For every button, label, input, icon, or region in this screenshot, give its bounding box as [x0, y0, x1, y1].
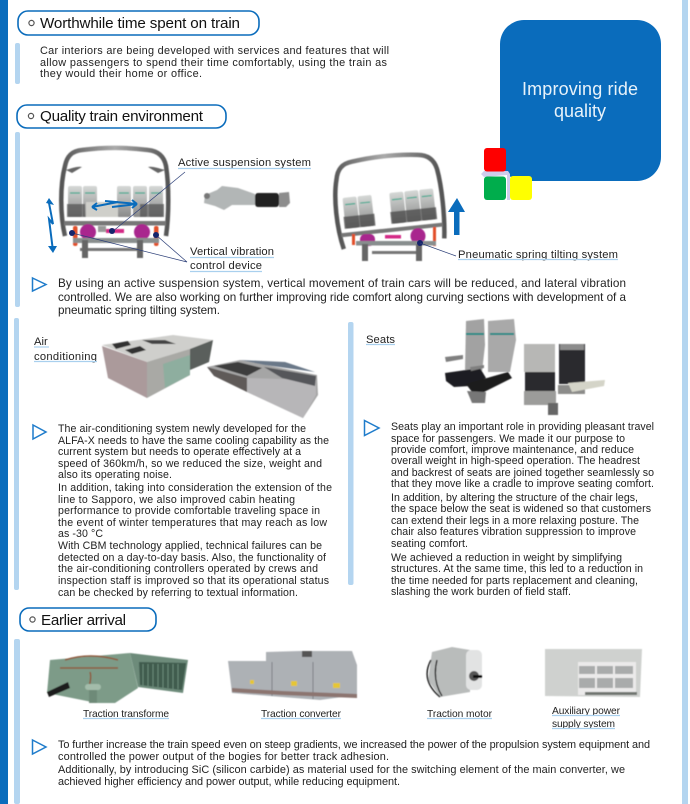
text block: air conditioning description: line to Sapporo, we also improved cabin heating [58, 494, 295, 506]
label: Active suspension system: Active suspension system [178, 157, 311, 169]
title card: Improving ride quality: Improving ride [522, 79, 638, 99]
label: Auxiliary power supply system: Auxiliary power [552, 706, 621, 717]
text block: seats description: slashing the work burden of field staff. [391, 586, 571, 598]
label: Air conditioning: conditioning [34, 351, 97, 363]
image: traction converter [228, 651, 357, 700]
text block: suspension description [32, 277, 626, 317]
image: seats [445, 319, 605, 415]
image: air conditioning units [102, 335, 318, 418]
title card: Improving ride quality: quality [554, 101, 606, 121]
image: traction transformer [47, 653, 188, 703]
text block: air conditioning description: the air-conditioning controllers operated by crews and [58, 563, 318, 575]
text block: earlier arrival description [32, 739, 650, 788]
heading: Earlier arrival [20, 608, 156, 631]
label: Seats: Seats [366, 334, 395, 346]
text block: suspension description: controlled. We are also working on further improving ride comfort along curving sections with development of a [58, 291, 626, 304]
text block: suspension description: pneumatic spring tilting system. [58, 304, 220, 317]
text block: seats description: seating comfort. [391, 538, 468, 550]
text block: earlier arrival description: To further increase the train speed even on steep gradients, we increased the power of the propulsion system equipment and [58, 739, 650, 751]
image: traction motor [427, 647, 482, 697]
text block: air conditioning description: speed of 360km/h, so we reduced the size, weight and [58, 458, 322, 470]
panel: worthwhile time text: allow passengers to spend their time comfortably, using the train as [40, 57, 388, 69]
callout dots and leader lines [69, 172, 187, 262]
text block: suspension description: By using an active suspension system, vertical movement of train cars will be reduced, and lateral vibration [58, 277, 626, 290]
text block: seats description: the time needed for parts replacement and cleaning, [391, 575, 638, 587]
text block: air conditioning description: ALFA-X needs to have the same cooling capability as the [58, 435, 329, 447]
title card: Improving ride quality [500, 20, 661, 181]
heading: Earlier arrival: Earlier arrival [41, 612, 126, 629]
label: Auxiliary power supply system: supply system [552, 719, 615, 730]
panel: quality train environment bar [15, 132, 20, 307]
icon: coloured squares [481, 148, 532, 200]
heading: Worthwhile time spent on train: Worthwhile time spent on train [40, 15, 240, 32]
illustration: tilted train cross section [331, 150, 447, 261]
text block: seats description: and backrest of seats are joined together seamlessly so [391, 467, 654, 479]
panel: worthwhile time text: they would their home or office. [40, 68, 202, 80]
text block: air conditioning description: the event of winter temperatures that may reach as low [58, 517, 327, 529]
text block: air conditioning description: The air-conditioning system newly developed for the [58, 423, 306, 435]
label: Air conditioning: Air [34, 336, 48, 348]
icon: tilt up arrow [448, 198, 465, 235]
label: Traction converter: Traction converter [261, 709, 342, 720]
text block: seats description: We achieved a reduction in weight by simplifying [391, 552, 622, 564]
text block: seats description: space for passengers. We made it our purpose to [391, 433, 625, 445]
text block: air conditioning description: also its operating noise. [58, 469, 172, 481]
text block: seats description: In addition, by altering the structure of the chair legs, [391, 492, 638, 504]
text block: seats description: that they move like a cradle to improve seating comfort. [391, 478, 654, 490]
text block: seats description: structures. At the same time, this led to a reduction in [391, 563, 643, 575]
heading: Quality train environment: Quality train environment [40, 108, 204, 125]
text block: air conditioning description: With CBM technology applied, technical failures can be [58, 540, 322, 552]
panel: seats [348, 319, 605, 585]
text block: earlier arrival description: Additionally, by introducing SiC (silicon carbide) as material used for the switching element of the main converter, we [58, 764, 625, 776]
image: active suspension actuator [204, 186, 290, 210]
text block: earlier arrival description: achieved higher efficiency and power output, while reducing equipment. [58, 776, 400, 788]
text block: air conditioning description: inspection staff is improved so that its operational status [58, 575, 329, 587]
label: Auxiliary power supply system [552, 706, 621, 730]
text block: seats description [364, 420, 654, 598]
panel: earlier arrival bar [14, 639, 20, 804]
icon: lateral and vertical motion arrows [46, 198, 137, 253]
text block: air conditioning description: performance to provide comfortable traveling space in [58, 505, 320, 517]
text block: seats description: chair also features vibration suppression to improve [391, 526, 636, 538]
label: Air conditioning [34, 336, 97, 363]
heading: Quality train environment [17, 105, 226, 128]
heading: Worthwhile time spent on train [18, 11, 259, 35]
panel: air conditioning [14, 318, 318, 590]
callout: pneumatic spring leader [417, 240, 456, 256]
text block: seats description: the space below the seat is widened so that customers [391, 503, 651, 515]
text block: air conditioning description: In addition, taking into consideration the extension of the [58, 482, 332, 494]
text block: air conditioning description: can be checked by referring to textual information. [58, 587, 298, 599]
panel: worthwhile time text [15, 43, 389, 84]
text block: air conditioning description: detected on a day-to-day basis. Also, the functionality of [58, 552, 326, 564]
label: Traction motor: Traction motor [427, 709, 493, 720]
text block: air conditioning description: current system but needs to operate effectively at a [58, 446, 301, 458]
text block: earlier arrival description: controlled the power output of the bogies for better track adhesion. [58, 751, 389, 763]
label: Vertical vibration control device: control device [190, 260, 262, 272]
panel: worthwhile time text: Car interiors are being developed with services and features that will [40, 45, 389, 57]
label: Vertical vibration control device: Vertical vibration [190, 246, 274, 258]
text block: air conditioning description [33, 423, 332, 599]
text block: air conditioning description: as -30 °C [58, 528, 103, 540]
label: Traction transforme: Traction transforme [83, 709, 169, 720]
text block: seats description: can extend their legs in a more relaxing posture. The [391, 515, 639, 527]
label: Vertical vibration control device [190, 246, 274, 272]
text block: seats description: provide comfort, improve maintenance, and reduce [391, 444, 634, 456]
illustration: train cross section with active suspension [61, 148, 168, 258]
text block: seats description: overall weight in high-speed operation. The headrest [391, 455, 640, 467]
text block: seats description: Seats play an important role in providing pleasant travel [391, 421, 654, 433]
label: Pneumatic spring tilting system: Pneumatic spring tilting system [458, 249, 618, 261]
image: auxiliary power supply [545, 649, 642, 697]
